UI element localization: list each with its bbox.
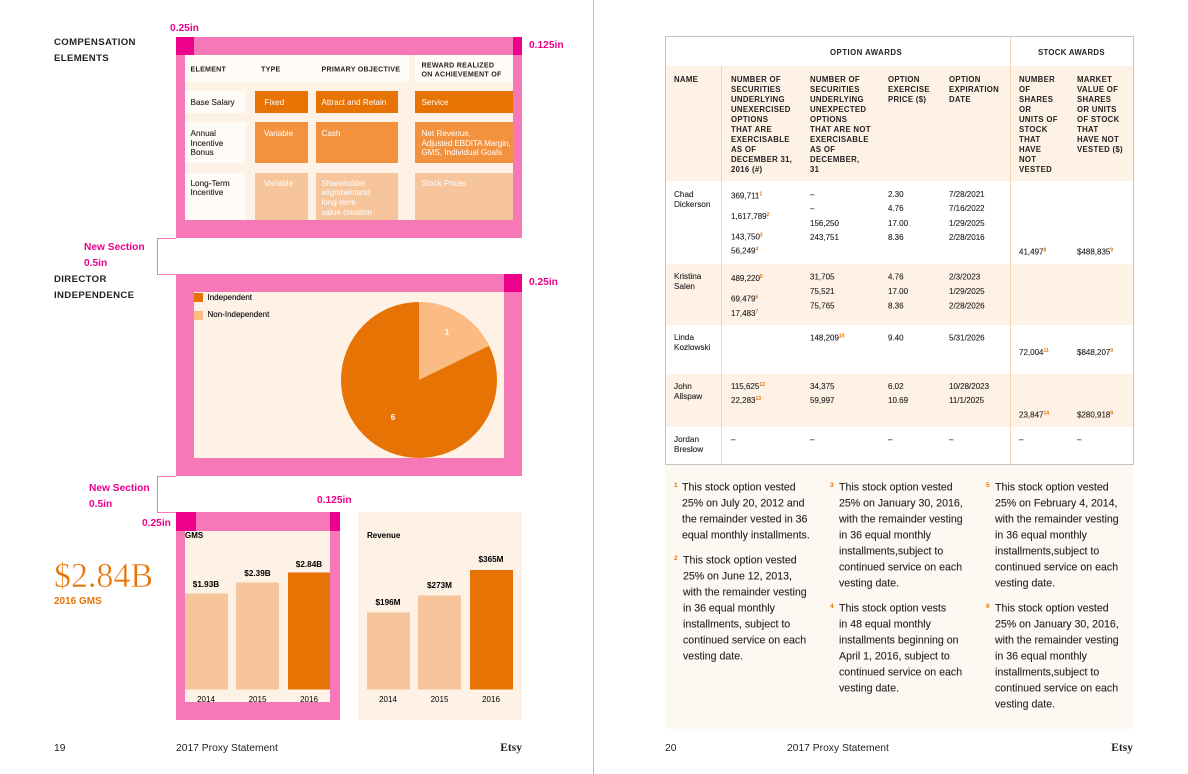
footer: left page: Etsy (500, 742, 522, 754)
row: Chad Dickerson: 156,250 (810, 219, 839, 228)
footnote 6 (986, 602, 1119, 710)
bar chart: GMS: $2.84B (296, 560, 322, 569)
column headers: EXERCISABLE (731, 135, 790, 144)
callout: 2016 GMS: 2016 GMS (54, 596, 102, 607)
annotation: 0.25in lower: 0.25in (142, 518, 171, 529)
row: Kristina Salen: 2/28/2026 (949, 302, 985, 310)
table row: base salary: Attract and Retain (322, 98, 386, 107)
footnote 4: continued service on each (839, 666, 962, 678)
table row: base salary: Service (422, 98, 449, 107)
row: Kristina Salen: Kristina (674, 272, 702, 281)
row: Kristina Salen: 17.00 (888, 287, 909, 296)
callout: 2016 GMS: $2.84B (54, 556, 153, 595)
row: Kristina Salen: 7 (755, 309, 758, 315)
row: Chad Dickerson: – (810, 204, 815, 213)
table row: annual incentive bonus (185, 122, 513, 163)
footnote 3: continued service on each (839, 562, 962, 574)
column headers: NUMBER (1019, 75, 1055, 84)
footnote 1: 1 (674, 482, 678, 489)
row: Chad Dickerson: 2/28/2016 (949, 233, 985, 242)
row: John Allspaw: Allspaw (674, 392, 702, 401)
row: Chad Dickerson: 8 (1043, 248, 1046, 254)
column headers: OPTION (949, 75, 981, 84)
table row: base salary (185, 91, 513, 113)
table row: long-term incentive: Shareholder (322, 179, 366, 188)
footer: right page: Etsy (1111, 742, 1133, 754)
footnote 5: This stock option vested (995, 482, 1109, 494)
footnote 1: the remainder vested in 36 (682, 514, 808, 526)
row: Chad Dickerson: – (810, 190, 815, 199)
annotation: new section bracket 2: New Section (89, 483, 150, 494)
bar chart: revenue: 2016 (482, 695, 500, 704)
footnote 5: installments,subject to (995, 546, 1099, 558)
row: Jordan Breslow: – (810, 435, 815, 444)
bar chart: GMS: $1.93B (193, 580, 219, 589)
bar chart: GMS (176, 512, 340, 720)
footnote 6: vesting date. (995, 698, 1055, 710)
column headers: DECEMBER, (810, 155, 860, 164)
panel: outstanding awards table (666, 36, 1134, 464)
table row: annual incentive bonus: Incentive (190, 139, 224, 148)
bar chart: revenue (358, 512, 522, 720)
footnote 2: vesting date. (683, 650, 743, 662)
row: John Allspaw: 59,997 (810, 396, 835, 405)
column headers: OF (1019, 85, 1030, 94)
row: John Allspaw: John (674, 382, 692, 391)
row: Chad Dickerson: Dickerson (674, 200, 711, 209)
row: Linda Kozlowski: $848,207 (1077, 348, 1110, 357)
row: Linda Kozlowski: 148,209 (810, 334, 839, 342)
legend: Non-Independent (208, 310, 270, 319)
row: John Allspaw: 22,283 (731, 396, 755, 405)
bar chart: GMS: 2015 (249, 695, 267, 704)
footnote 6: installments,subject to (995, 666, 1099, 678)
column headers: EXERCISABLE (810, 135, 869, 144)
table row: long-term incentive: Stock Prices (422, 179, 466, 188)
group headers (830, 48, 1105, 57)
group headers: STOCK AWARDS (1038, 48, 1105, 57)
table row: annual incentive bonus: Net Revenue, (422, 129, 471, 138)
legend: Independent (208, 293, 253, 302)
table row: long-term incentive: alignmentand (322, 188, 370, 197)
heading: director independence (54, 274, 135, 301)
table header row: ON ACHIEVEMENT OF (422, 70, 502, 78)
row: Linda Kozlowski: 5/31/2026 (949, 334, 985, 342)
legend (194, 293, 270, 320)
row: Jordan Breslow (674, 435, 1082, 454)
column headers: EXPIRATION (949, 85, 999, 94)
footnote 2: in 36 equal monthly (683, 602, 776, 614)
column headers: UNEXPECTED (810, 105, 866, 114)
row: Chad Dickerson: 1/29/2025 (949, 219, 985, 228)
row: Chad Dickerson: 4.76 (888, 204, 904, 213)
row: Chad Dickerson: 8.36 (888, 233, 904, 242)
row: Jordan Breslow: Jordan (674, 435, 699, 444)
bar chart: GMS: GMS (185, 531, 204, 540)
footnote 6: 6 (986, 603, 990, 610)
pie chart: 1 (445, 328, 450, 337)
footnote 5 (986, 482, 1119, 590)
annotation: new section bracket 1: New Section (84, 242, 145, 253)
footer: right page (665, 742, 1133, 754)
row: John Allspaw: 11/1/2025 (949, 396, 985, 405)
footnote 5: continued service on each (995, 562, 1118, 574)
column headers: HAVE (1019, 145, 1041, 154)
row: Kristina Salen: 69,479 (731, 294, 755, 304)
footnote 2: This stock option vested (683, 554, 797, 566)
table row: annual incentive bonus: Cash (322, 129, 340, 138)
row: Chad Dickerson: Chad (674, 190, 694, 199)
pie chart: 6 (391, 413, 396, 422)
row: Linda Kozlowski (674, 333, 1113, 357)
footnote 5: 5 (986, 482, 990, 489)
footnote 1: This stock option vested (682, 482, 796, 494)
annotation: new section bracket 1 (84, 238, 176, 274)
row: Chad Dickerson: 143,750 (731, 232, 760, 242)
row: John Allspaw: 10.69 (888, 396, 909, 405)
row: Linda Kozlowski: Linda (674, 333, 694, 342)
row: Chad Dickerson: 2.30 (888, 190, 904, 199)
column headers: THAT ARE NOT (810, 125, 871, 134)
annotation: 0.125in top: 0.125in (529, 40, 564, 51)
column headers: AS OF (810, 145, 835, 154)
bar chart: revenue: 2014 (379, 695, 397, 704)
footnote 3: in 36 equal monthly (839, 530, 932, 542)
footnote 4: April 1, 2016, subject to (839, 650, 950, 662)
footnote 6: This stock option vested (995, 602, 1109, 614)
footnote 6: 25% on January 30, 2016, (995, 618, 1119, 630)
table row: long-term incentive: value creation (322, 208, 372, 217)
footnote 6: continued service on each (995, 682, 1118, 694)
heading: compensation elements: COMPENSATION (54, 37, 136, 48)
bar chart: GMS: $2.39B (244, 569, 271, 578)
column headers: SHARES (1019, 95, 1053, 104)
row: John Allspaw: 13 (755, 396, 761, 402)
footer: left page: 2017 Proxy Statement (176, 743, 278, 754)
group headers: OPTION AWARDS (830, 48, 902, 57)
row: Chad Dickerson: 9 (1110, 248, 1113, 254)
column headers: 31 (810, 165, 820, 174)
pie chart (341, 302, 497, 458)
table row: long-term incentive: Incentive (190, 188, 224, 197)
row: Linda Kozlowski: 9.40 (888, 334, 904, 342)
row: Linda Kozlowski: 10 (839, 334, 845, 340)
footnote 3: 25% on January 30, 2016, (839, 498, 963, 510)
row: Jordan Breslow: – (888, 435, 893, 444)
column headers: THAT ARE (731, 125, 772, 134)
heading: compensation elements: ELEMENTS (54, 53, 109, 64)
footer: left page: 19 (54, 743, 66, 754)
footnote 1: equal monthly installments. (682, 530, 810, 542)
footnote 4: This stock option vests (839, 602, 946, 614)
annotation: new section bracket 2 (89, 476, 176, 512)
table header row: PRIMARY OBJECTIVE (322, 66, 400, 74)
column headers: VALUE OF (1077, 85, 1118, 94)
column headers: DECEMBER 31, (731, 155, 792, 164)
table row: annual incentive bonus: Annual (190, 129, 216, 138)
column headers: UNITS OF (1019, 115, 1058, 124)
table row: annual incentive bonus: Adjusted EBDITA Margin, (422, 139, 510, 148)
footnote 5: vesting date. (995, 578, 1055, 590)
heading: director independence: INDEPENDENCE (54, 290, 135, 301)
row: John Allspaw: 14 (1043, 410, 1049, 416)
footer: right page: 2017 Proxy Statement (787, 743, 889, 754)
row: Jordan Breslow: – (731, 435, 736, 444)
column headers: PRICE ($) (888, 95, 926, 104)
annotation: new section bracket 1: 0.5in (84, 258, 107, 269)
row: John Allspaw: 23,847 (1019, 410, 1043, 420)
panel: footnotes background (665, 464, 1133, 729)
footnote 1 (674, 482, 810, 542)
row: John Allspaw: 34,375 (810, 382, 835, 391)
column headers (674, 75, 1123, 174)
row: Jordan Breslow: – (949, 435, 954, 444)
row: John Allspaw: 12 (759, 382, 765, 388)
column headers: OPTION (888, 75, 920, 84)
row: Chad Dickerson: 7/28/2021 (949, 190, 985, 199)
bar chart: revenue: Revenue (367, 531, 401, 540)
footnote 6: with the remainder vesting (994, 634, 1119, 646)
footnote 3: 3 (830, 482, 834, 489)
column headers: UNDERLYING (731, 95, 785, 104)
footnote 2 (674, 554, 807, 662)
column headers: OR UNITS (1077, 105, 1117, 114)
column headers: 2016 (#) (731, 165, 763, 174)
footnote 3: This stock option vested (839, 482, 953, 494)
row: Chad Dickerson: 3 (760, 232, 763, 238)
row: John Allspaw: 10/28/2023 (949, 382, 990, 391)
row: Chad Dickerson: 4 (755, 246, 758, 252)
footnote 2: 2 (674, 555, 678, 562)
column headers: EXERCISE (888, 85, 930, 94)
column headers: NUMBER OF (731, 75, 781, 84)
bar chart: revenue: $196M (375, 598, 401, 607)
panel: director independence pie chart with pink margins (176, 274, 522, 476)
footnote 3: installments,subject to (839, 546, 943, 558)
row: John Allspaw: 115,625 (731, 382, 759, 391)
footnote 5: in 36 equal monthly (995, 530, 1088, 542)
footnote 2: continued service on each (683, 634, 806, 646)
column headers: NUMBER OF (810, 75, 860, 84)
table row: long-term incentive: Variable (264, 179, 294, 188)
table row: base salary: Fixed (264, 98, 284, 107)
footnote 2: installments, subject to (683, 618, 790, 630)
annotation: new section bracket 2: 0.5in (89, 499, 112, 510)
row: Chad Dickerson: 41,497 (1019, 248, 1043, 256)
footnote 2: 25% on June 12, 2013, (683, 570, 792, 582)
row: Kristina Salen: 6 (755, 294, 758, 300)
row: Kristina Salen: 489,220 (731, 274, 760, 283)
row: Chad Dickerson: 243,751 (810, 233, 839, 242)
column headers: HAVE NOT (1077, 135, 1119, 144)
row: Chad Dickerson: 369,711 (731, 192, 759, 200)
column headers: SHARES (1077, 95, 1111, 104)
row: Jordan Breslow: Breslow (674, 445, 703, 454)
row: Kristina Salen: 5 (760, 274, 763, 280)
footnote 2: with the remainder vesting (682, 586, 807, 598)
column headers: NOT (1019, 155, 1036, 164)
row: Chad Dickerson: $488,835 (1077, 248, 1110, 256)
bar chart: GMS: 2014 (197, 695, 215, 704)
column headers: SECURITIES (810, 85, 860, 94)
table header row: REWARD REALIZED (422, 62, 494, 70)
column headers: THAT (1019, 135, 1040, 144)
column headers: OPTIONS (810, 115, 847, 124)
row: Linda Kozlowski: 9 (1110, 348, 1113, 354)
table row: annual incentive bonus: GMS, Individual Goals (422, 148, 502, 157)
column headers: DATE (949, 95, 971, 104)
row: Kristina Salen: 8.36 (888, 302, 904, 310)
row: Chad Dickerson (674, 190, 1113, 256)
footnote 6: in 36 equal monthly (995, 650, 1088, 662)
bar chart: revenue: $273M (427, 581, 452, 590)
footnote 3: with the remainder vesting (838, 514, 963, 526)
table row: base salary: Base Salary (190, 98, 236, 107)
row: Chad Dickerson: 2 (767, 212, 770, 218)
column headers: OPTIONS (731, 115, 768, 124)
panel: compensation table with pink margins (176, 37, 522, 238)
footnote 1: 25% on July 20, 2012 and (682, 498, 805, 510)
row: Kristina Salen: 2/3/2023 (949, 272, 981, 282)
bar chart: GMS: 2016 (300, 695, 318, 704)
footnote 4: 4 (830, 603, 834, 610)
footnote 4: installments beginning on (839, 634, 959, 646)
row: Chad Dickerson: 56,249 (731, 246, 755, 256)
row: Chad Dickerson: 1 (759, 192, 762, 198)
footnote 5: 25% on February 4, 2014, (995, 498, 1118, 510)
row: John Allspaw (674, 382, 1113, 420)
row: Chad Dickerson: 1,617,789 (731, 212, 767, 221)
row: Jordan Breslow: – (1077, 435, 1082, 444)
row: John Allspaw: 9 (1110, 410, 1113, 416)
annotation: 0.25in middle: 0.25in (529, 277, 558, 288)
row: Kristina Salen: 17,483 (731, 309, 755, 318)
footer: right page: 20 (665, 743, 677, 754)
bar chart: revenue: 2015 (431, 695, 449, 704)
footnote 5: with the remainder vesting (994, 514, 1119, 526)
column headers: OR (1019, 105, 1031, 114)
column headers: VESTED ($) (1077, 145, 1123, 154)
row: Kristina Salen: 31,705 (810, 272, 835, 282)
footnote 4: vesting date. (839, 682, 899, 694)
row: Chad Dickerson: 17.00 (888, 219, 909, 228)
table row: long-term incentive: Long-Term (190, 179, 230, 188)
row: Kristina Salen: 1/29/2025 (949, 287, 985, 296)
row: Jordan Breslow: – (1019, 435, 1024, 444)
row: Kristina Salen: Salen (674, 282, 695, 291)
table row: annual incentive bonus: Variable (264, 129, 294, 138)
row: Kristina Salen: 4.76 (888, 272, 904, 282)
bar chart: revenue: $365M (478, 555, 504, 564)
heading: compensation elements (54, 37, 136, 64)
row: Kristina Salen (674, 272, 985, 318)
row: Kristina Salen: 75,765 (810, 302, 835, 310)
table row: long-term incentive (185, 173, 513, 220)
column headers: UNEXERCISED (731, 105, 791, 114)
footnote 4: in 48 equal monthly (839, 618, 932, 630)
table header row: ELEMENT (190, 66, 227, 74)
footnote 3 (830, 482, 963, 590)
table row: long-term incentive: long-term (322, 198, 356, 207)
column headers: AS OF (731, 145, 756, 154)
row: John Allspaw: 6.02 (888, 382, 904, 391)
annotation: 0.25in top: 0.25in (170, 23, 199, 34)
column headers: STOCK (1019, 125, 1048, 134)
column headers: SECURITIES (731, 85, 781, 94)
table row: annual incentive bonus: Bonus (190, 148, 214, 157)
footnote 3: vesting date. (839, 578, 899, 590)
table header row: TYPE (261, 66, 281, 74)
row: Kristina Salen: 75,521 (810, 287, 835, 296)
row: Linda Kozlowski: 11 (1043, 348, 1049, 354)
column headers: THAT (1077, 125, 1098, 134)
column headers: UNDERLYING (810, 95, 864, 104)
column headers: MARKET (1077, 75, 1112, 84)
row: Chad Dickerson: 7/16/2022 (949, 204, 985, 213)
column headers: VESTED (1019, 165, 1052, 174)
row: Linda Kozlowski: 72,004 (1019, 348, 1043, 357)
annotation: 0.125in lower: 0.125in (317, 495, 352, 506)
table header row (185, 55, 513, 82)
footnote 4 (830, 602, 962, 694)
column headers: OF STOCK (1077, 115, 1120, 124)
heading: director independence: DIRECTOR (54, 274, 107, 285)
row: John Allspaw: $280,918 (1077, 410, 1110, 420)
row: Linda Kozlowski: Kozlowski (674, 343, 711, 352)
column headers: NAME (674, 75, 698, 84)
footer: left page (54, 742, 522, 754)
